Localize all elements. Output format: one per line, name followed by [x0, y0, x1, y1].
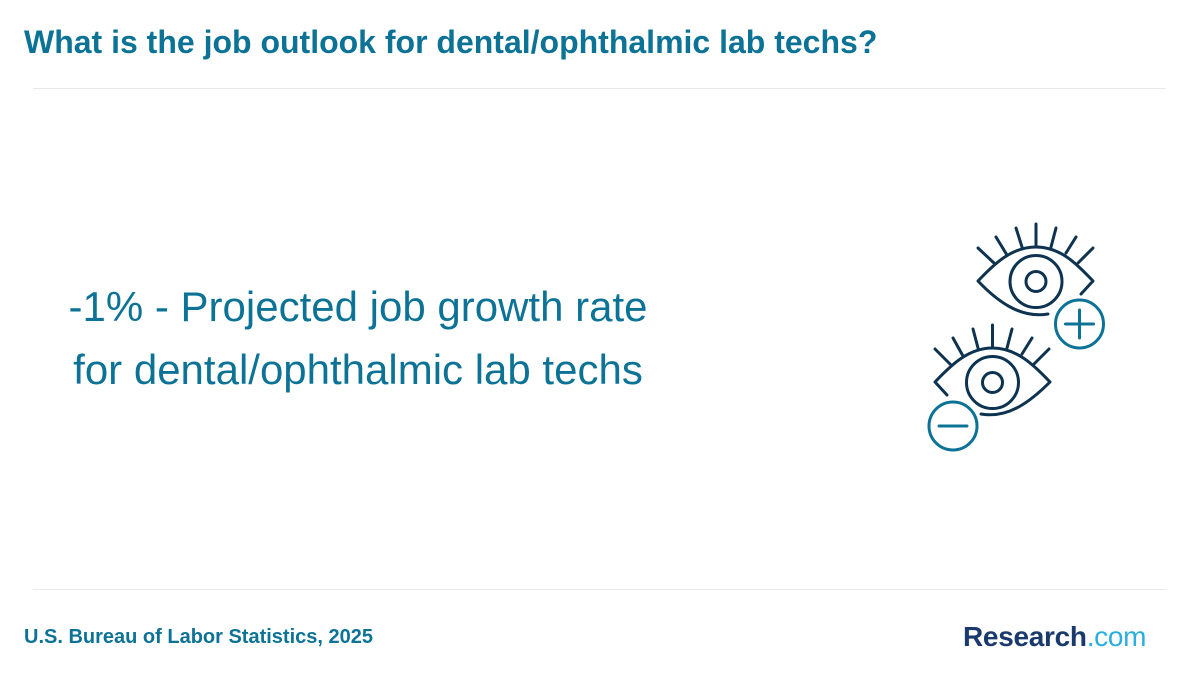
main statement	[69, 283, 647, 393]
icon: eyes with plus and minus	[928, 222, 1105, 452]
title: What is the job outlook for dental/ophthalmic lab techs?	[24, 24, 877, 60]
icon: plus circle	[1056, 300, 1104, 348]
main statement: -1% - Projected job growth rate	[69, 283, 647, 330]
icon: lower eye	[935, 325, 1050, 415]
icon: minus circle	[929, 402, 977, 450]
source note: U.S. Bureau of Labor Statistics, 2025	[24, 626, 373, 648]
main statement: for dental/ophthalmic lab techs	[73, 346, 643, 393]
icon: upper eye	[978, 224, 1093, 315]
logo: Research.com: Research.com	[963, 621, 1146, 652]
